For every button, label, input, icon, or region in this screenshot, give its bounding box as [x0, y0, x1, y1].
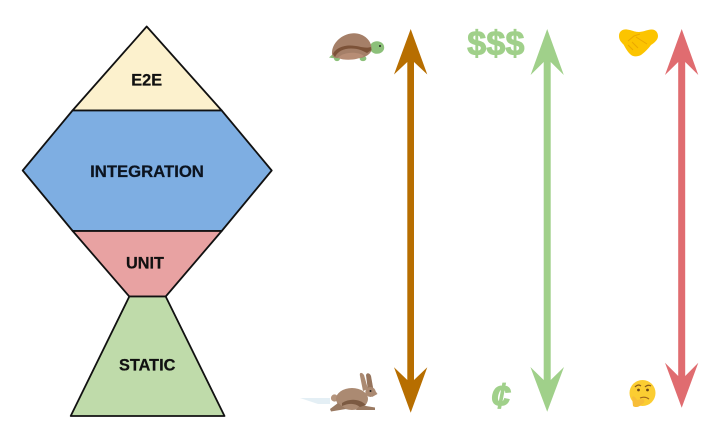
layer: UNIT: [73, 231, 222, 296]
arrow: cost: [530, 29, 564, 412]
icon: turtle: [329, 33, 384, 61]
arrow: confidence: [665, 29, 698, 408]
icon: cent: ¢: [491, 375, 511, 416]
layer: E2E: E2E: [131, 71, 162, 89]
test pyramid diagram: [23, 26, 272, 416]
layer: UNIT: UNIT: [126, 255, 164, 273]
icon: dollars: $$$: [467, 25, 525, 63]
layer: INTEGRATION: [23, 110, 272, 231]
layer: STATIC: [71, 296, 224, 416]
layer: E2E: [72, 26, 222, 110]
icon: handshake: [619, 29, 658, 56]
layer: STATIC: STATIC: [119, 356, 176, 374]
icon: thinking face: [630, 380, 656, 407]
layer: INTEGRATION: INTEGRATION: [90, 162, 204, 181]
arrow: speed: [394, 29, 427, 413]
icon: rabbit: [300, 373, 378, 412]
